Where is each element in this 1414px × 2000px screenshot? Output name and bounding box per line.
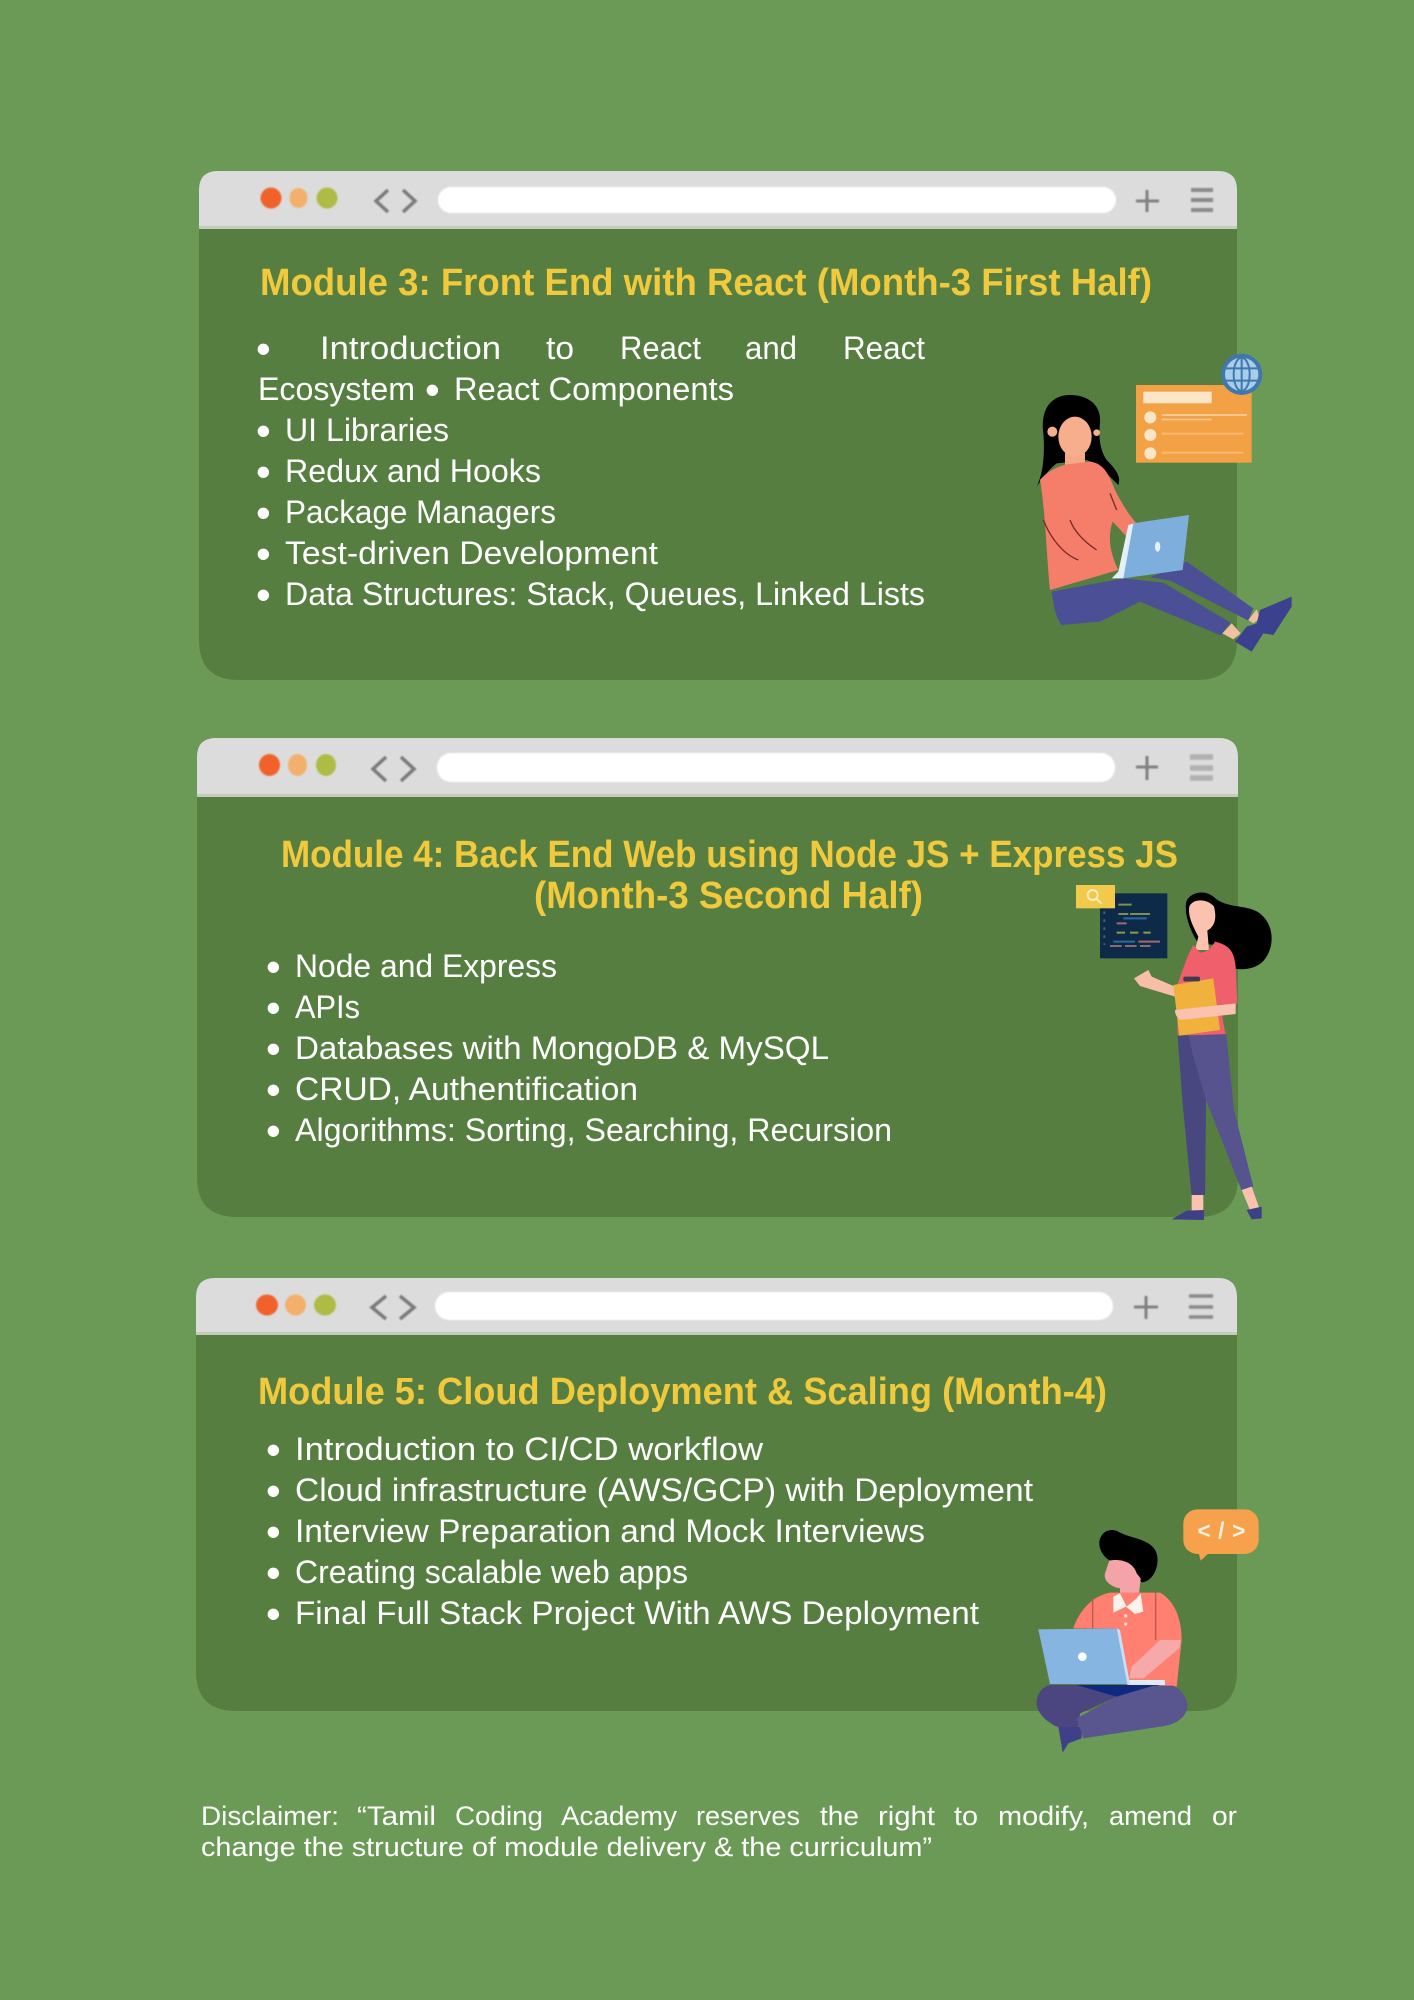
list: module 3 topics: • bbox=[256, 448, 271, 495]
disclaimer text: right bbox=[878, 1801, 936, 1831]
heading: module 4: (Month-3 Second Half) bbox=[534, 875, 923, 917]
list: module 3 topics: React bbox=[843, 330, 925, 366]
list: module 4 topics: • bbox=[266, 1107, 281, 1154]
list: module 3 topics bbox=[256, 325, 925, 618]
browser toolbar bbox=[199, 171, 1237, 229]
card: code window bbox=[1100, 893, 1167, 958]
disclaimer text: amend bbox=[1109, 1801, 1192, 1831]
list: module 3 topics: React bbox=[620, 330, 701, 366]
list: module 3 topics: React Components bbox=[454, 371, 734, 407]
list: module 4 topics: APIs bbox=[295, 989, 360, 1025]
disclaimer text: change the structure of module delivery & the curriculum” bbox=[201, 1832, 932, 1862]
list: module 5 topics: Creating scalable web apps bbox=[295, 1554, 688, 1590]
disclaimer text: modify, bbox=[998, 1801, 1089, 1831]
panel: module 5 bbox=[196, 1278, 1259, 1753]
disclaimer text: “Tamil bbox=[357, 1801, 436, 1831]
list: module 3 topics: Ecosystem bbox=[258, 371, 415, 407]
list: module 4 topics: • bbox=[266, 1025, 281, 1072]
disclaimer text bbox=[201, 1801, 1237, 1862]
disclaimer text: Academy bbox=[561, 1801, 678, 1831]
list: module 5 topics: Final Full Stack Project With AWS Deployment bbox=[295, 1595, 979, 1631]
list: module 3 topics: • bbox=[256, 407, 271, 454]
list: module 3 topics: • bbox=[256, 530, 271, 577]
illustration: woman sitting with laptop bbox=[1037, 354, 1292, 652]
browser toolbar bbox=[196, 1278, 1237, 1335]
browser toolbar bbox=[197, 738, 1238, 797]
callout: code speech bubble bbox=[1183, 1509, 1259, 1561]
list: module 3 topics: • bbox=[425, 366, 440, 413]
list: module 4 topics: • bbox=[266, 943, 281, 990]
list: module 3 topics: Introduction bbox=[320, 330, 501, 366]
icon: globe bbox=[1221, 354, 1262, 395]
list: module 4 topics: Databases with MongoDB & MySQL bbox=[295, 1030, 829, 1066]
list: module 5 topics bbox=[266, 1426, 1033, 1637]
list: module 5 topics: • bbox=[266, 1467, 281, 1514]
list: module 3 topics: to bbox=[546, 330, 574, 366]
callout: code speech bubble: < / > bbox=[1197, 1518, 1245, 1544]
list: module 4 topics: Algorithms: Sorting, Searching, Recursion bbox=[295, 1112, 892, 1148]
list: module 5 topics: • bbox=[266, 1508, 281, 1555]
list: module 3 topics: Test-driven Development bbox=[285, 535, 658, 571]
list: module 3 topics: • bbox=[256, 571, 271, 618]
disclaimer text: to bbox=[954, 1801, 978, 1831]
illustration: woman standing with clipboard bbox=[1076, 885, 1272, 1220]
list: module 4 topics: CRUD, Authentification bbox=[295, 1071, 638, 1107]
heading: module 4: Module 4: Back End Web using Node JS + Express JS bbox=[281, 834, 1178, 876]
list: module 3 topics: • bbox=[256, 489, 271, 536]
panel body bbox=[196, 1328, 1237, 1711]
list: module 5 topics: • bbox=[266, 1549, 281, 1596]
disclaimer text: Disclaimer: bbox=[201, 1801, 339, 1831]
heading: module 5: Module 5: Cloud Deployment & Scaling (Month-4) bbox=[258, 1371, 1107, 1413]
list: module 4 topics: Node and Express bbox=[295, 948, 557, 984]
list: module 3 topics: and bbox=[745, 330, 797, 366]
disclaimer text: or bbox=[1212, 1801, 1237, 1831]
card: orange list window bbox=[1136, 385, 1252, 463]
disclaimer text: the bbox=[820, 1801, 859, 1831]
list: module 5 topics: Interview Preparation and Mock Interviews bbox=[295, 1513, 925, 1549]
list: module 3 topics: Package Managers bbox=[285, 494, 556, 530]
panel body bbox=[199, 222, 1237, 680]
list: module 3 topics: UI Libraries bbox=[285, 412, 449, 448]
list: module 3 topics: Redux and Hooks bbox=[285, 453, 541, 489]
disclaimer text: Coding bbox=[455, 1801, 543, 1831]
list: module 4 topics: • bbox=[266, 984, 281, 1031]
list: module 5 topics: • bbox=[266, 1426, 281, 1473]
list: module 3 topics: Data Structures: Stack, Queues, Linked Lists bbox=[285, 576, 925, 612]
list: module 5 topics: • bbox=[266, 1590, 281, 1637]
disclaimer text: reserves bbox=[696, 1801, 800, 1831]
list: module 5 topics: Introduction to CI/CD workflow bbox=[295, 1431, 764, 1467]
list: module 4 topics: • bbox=[266, 1066, 281, 1113]
icon: search tag bbox=[1076, 885, 1115, 908]
heading: module 4 bbox=[281, 834, 1178, 917]
illustration: man cross-legged with laptop bbox=[1036, 1509, 1259, 1753]
panel: module 4 bbox=[197, 738, 1272, 1220]
heading: module 3: Module 3: Front End with React (Month-3 First Half) bbox=[260, 262, 1152, 304]
list: module 5 topics: Cloud infrastructure (AWS/GCP) with Deployment bbox=[295, 1472, 1033, 1508]
list: module 3 topics: • bbox=[256, 325, 271, 372]
panel body bbox=[197, 790, 1238, 1217]
panel: module 3 bbox=[199, 171, 1292, 680]
list: module 4 topics bbox=[266, 943, 892, 1154]
